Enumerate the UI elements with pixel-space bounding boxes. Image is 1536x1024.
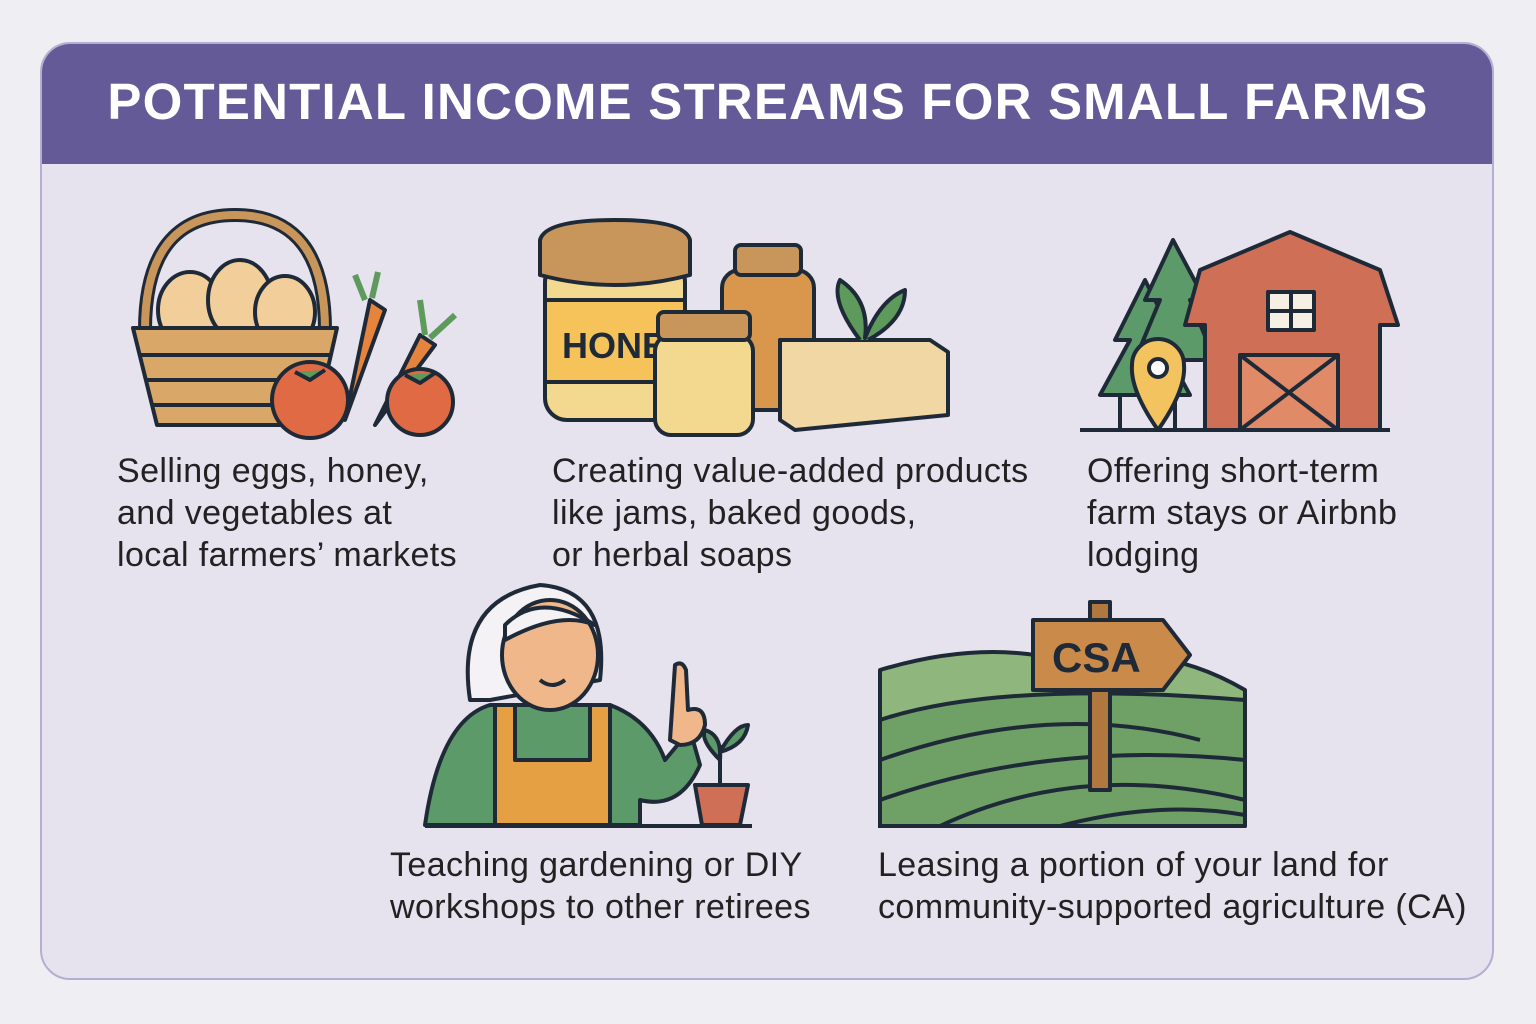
text: CSA leasing: Leasing a portion of your land for [878, 846, 1389, 884]
text: value-added products: Creating value-added products [552, 452, 1029, 490]
icon: fields with CSA sign: CSA [1052, 634, 1141, 681]
text: CSA leasing [878, 846, 1467, 926]
text: CSA leasing: community-supported agriculture (CA) [878, 888, 1467, 926]
text: value-added products [552, 452, 1029, 574]
text: eggs honey vegetables: Selling eggs, honey, [117, 452, 429, 490]
icon: teacher woman with plant [425, 585, 752, 826]
icon: jars and soap [540, 220, 948, 435]
icon: fields with CSA sign [878, 602, 1246, 826]
icon: jars and soap: HONEY [562, 325, 690, 366]
text: value-added products: or herbal soaps [552, 536, 792, 574]
text: workshops: Teaching gardening or DIY [390, 846, 803, 884]
icon: basket with eggs and vegetables [133, 215, 455, 438]
text: farm stays [1087, 452, 1397, 574]
text: workshops [390, 846, 811, 926]
text: eggs honey vegetables [117, 452, 457, 574]
text: farm stays: lodging [1087, 536, 1199, 574]
text: workshops: workshops to other retirees [390, 888, 811, 926]
icon: barn with trees and pin [1080, 232, 1398, 430]
text: eggs honey vegetables: and vegetables at [117, 494, 392, 532]
text: farm stays: farm stays or Airbnb [1087, 494, 1397, 532]
text: farm stays: Offering short-term [1087, 452, 1379, 490]
text: value-added products: like jams, baked goods, [552, 494, 917, 532]
text: eggs honey vegetables: local farmers’ markets [117, 536, 457, 574]
title: POTENTIAL INCOME STREAMS FOR SMALL FARMS [107, 73, 1429, 130]
